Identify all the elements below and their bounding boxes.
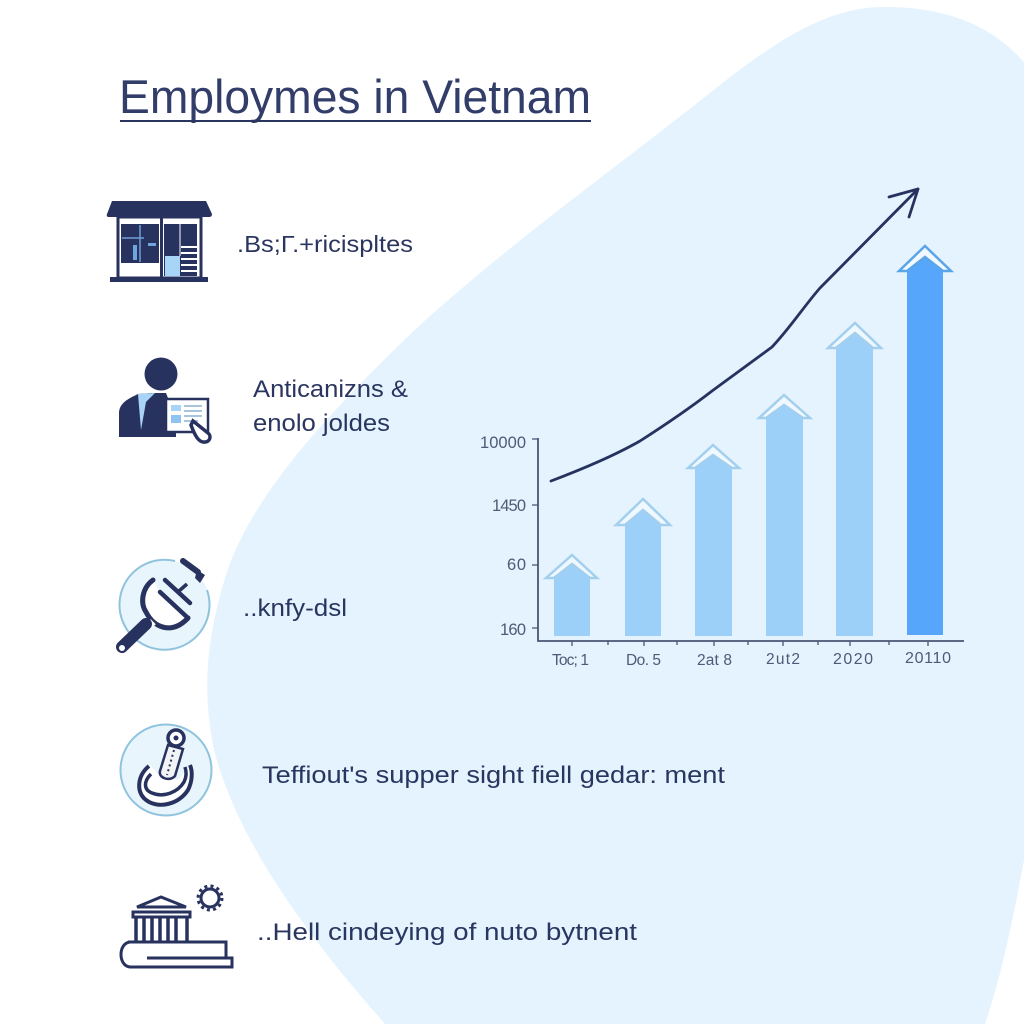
label: row 1: .Bs;Γ.+ricispltes	[237, 231, 413, 257]
axes	[532, 438, 964, 646]
x axis labels: 2ut2	[766, 651, 800, 668]
label: row 3: ..knfy-dsl	[243, 595, 347, 622]
x axis labels: Do. 5	[626, 652, 661, 669]
arrow caps	[546, 246, 951, 578]
y axis labels: 60	[507, 556, 526, 574]
y axis labels: 1450	[492, 497, 526, 515]
x axis labels: 2020	[833, 651, 873, 668]
x axis labels: 2at 8	[697, 652, 732, 669]
icon: magnifier tool	[119, 560, 210, 651]
y axis labels: 160	[500, 621, 526, 639]
icon: person with tablet	[119, 358, 210, 442]
y axis labels	[480, 434, 526, 639]
x axis labels: 20110	[905, 650, 951, 667]
x axis labels	[552, 650, 951, 669]
label: row 5: ..Hell cindeying of nuto bytnent	[257, 919, 637, 946]
label: row 2: Anticanizns &	[253, 376, 408, 403]
x axis labels: Toc; 1	[552, 652, 589, 669]
label: row 4: Teffiout's supper sight fiell gedar: ment	[262, 762, 725, 789]
bar chart	[480, 189, 964, 669]
icon: temple on book with gear	[121, 886, 232, 967]
icon: building	[107, 201, 212, 282]
label: row 2: enolo joldes	[253, 410, 390, 437]
title: Employmes in Vietnam	[119, 70, 591, 123]
label: row 2	[253, 376, 408, 437]
background blob	[207, 7, 1024, 1024]
y axis labels: 10000	[480, 434, 526, 452]
icon: hook	[120, 724, 212, 816]
bars	[554, 257, 943, 636]
trend arrow	[551, 189, 918, 481]
